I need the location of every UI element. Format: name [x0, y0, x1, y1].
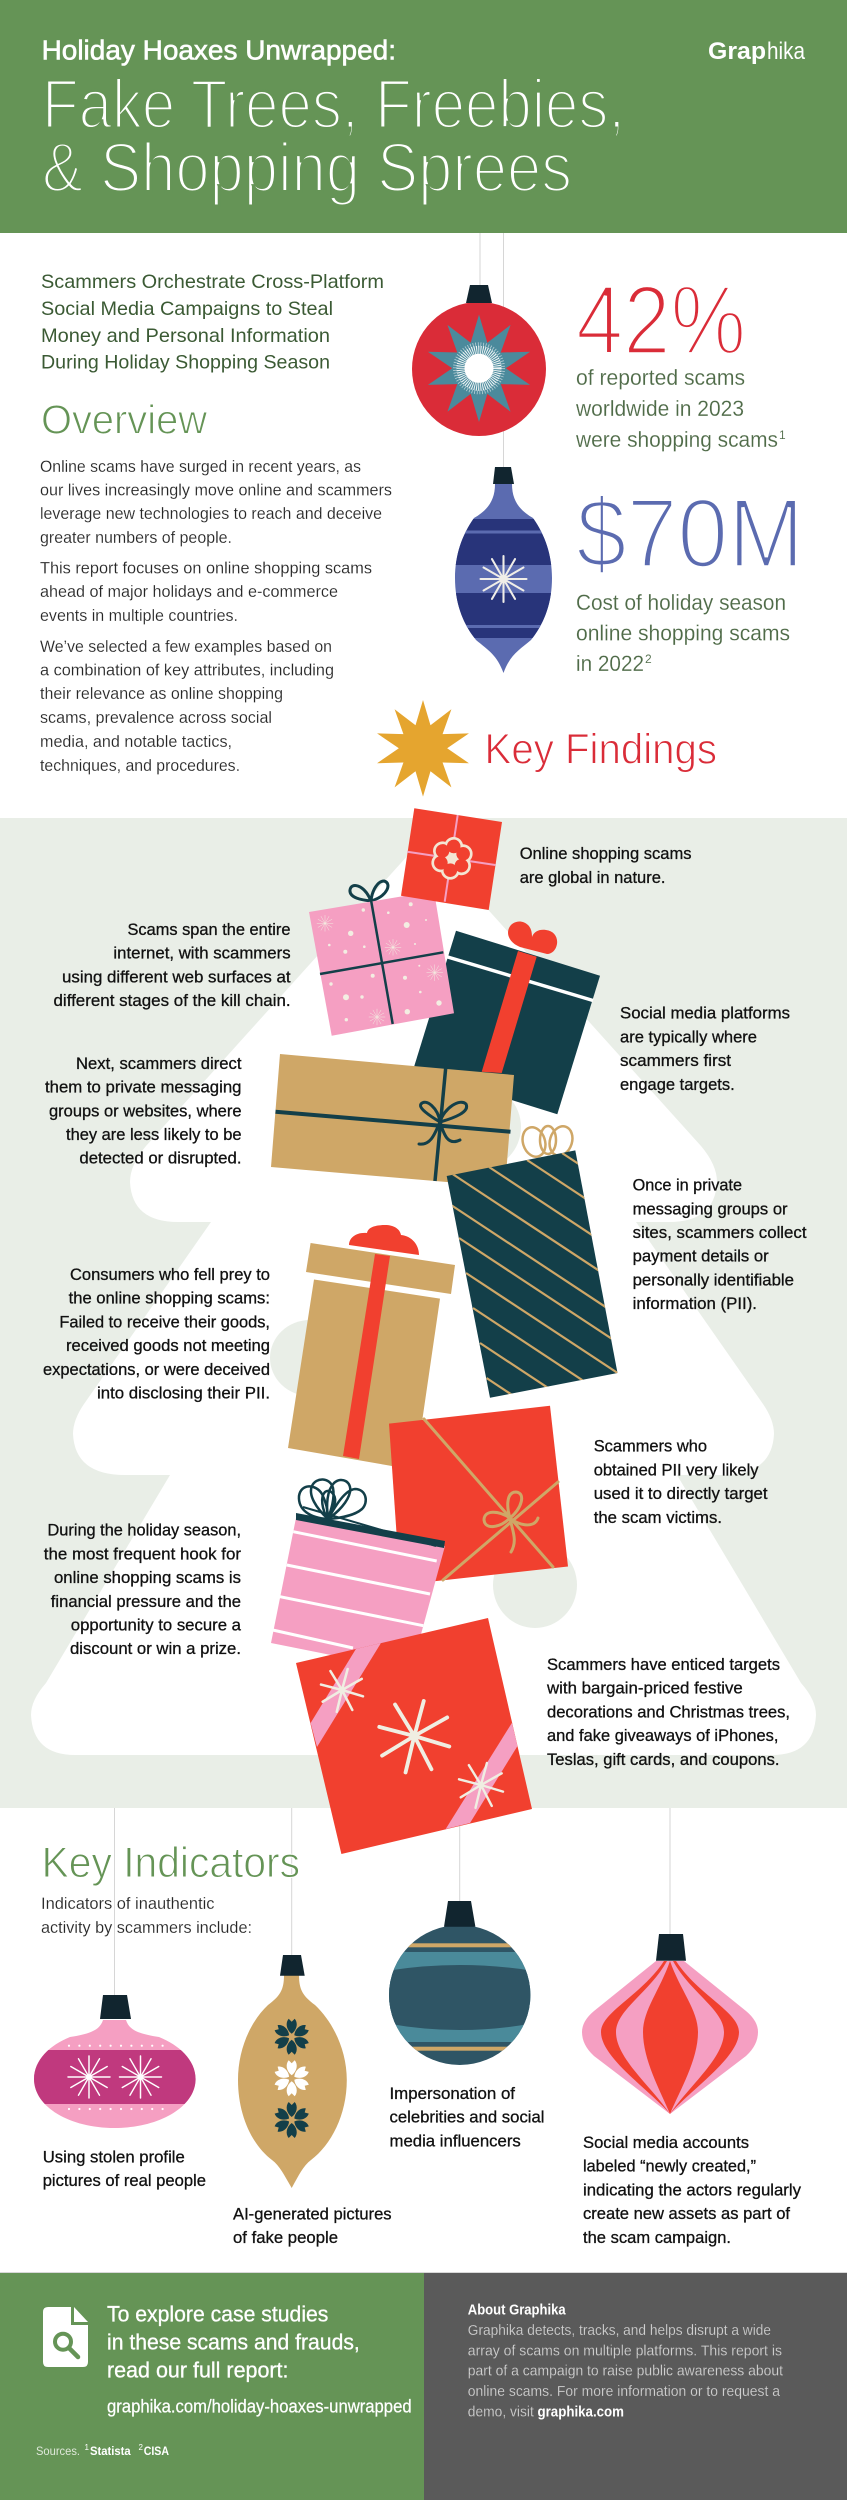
main title — [42, 65, 625, 206]
logo: Graphika: hika — [767, 38, 806, 65]
finding: entire internet: internet, with scammers — [113, 944, 291, 963]
stat caption: of reported scams — [576, 365, 745, 390]
caption: AI pictures: AI-generated pictures — [233, 2204, 392, 2223]
ornament: teal striped — [389, 1901, 530, 2065]
finding: global: are global in nature. — [520, 868, 666, 887]
overview body text: This report focuses on online shopping scams — [40, 558, 372, 578]
finding: entire internet: different stages of the kill chain. — [54, 991, 291, 1010]
overview body text: media, and notable tactics, — [40, 732, 232, 751]
finding: direct targeting: obtained PII very likely — [594, 1460, 759, 1479]
subhead — [41, 271, 384, 374]
ornament: tan with flowers — [238, 1955, 347, 2188]
subhead: During Holiday Shopping Season — [41, 352, 330, 374]
caption: impersonation: media influencers — [390, 2132, 521, 2151]
sources: Sources. — [36, 2444, 80, 2458]
stat caption: in 2022 — [576, 651, 644, 676]
finding: PII: information (PII). — [633, 1294, 757, 1313]
finding: direct targeting — [594, 1437, 768, 1527]
finding: social media — [620, 1003, 790, 1094]
caption: AI pictures — [233, 2204, 392, 2247]
finding: consumers: the online shopping scams: — [69, 1289, 270, 1308]
stat caption: worldwide in 2023 — [575, 396, 744, 421]
finding: PII: personally identifiable — [633, 1270, 794, 1289]
finding: social media: are typically where — [620, 1027, 757, 1046]
caption: newly created: create new assets as part of — [583, 2204, 790, 2223]
indicators intro: Indicators of inauthentic — [41, 1894, 215, 1913]
finding: social media: Social media platforms — [620, 1003, 790, 1022]
about text — [468, 2322, 784, 2420]
finding: direct targeting: the scam victims. — [594, 1508, 722, 1527]
about text: array of scams on multiple platforms. This report is — [468, 2342, 782, 2359]
finding: social media: engage targets. — [620, 1075, 735, 1094]
main title: Fake Trees, Freebies, — [42, 65, 625, 143]
finding: PII: messaging groups or — [633, 1199, 788, 1218]
about text: demo, visit — [468, 2403, 535, 2420]
tree silhouette — [31, 838, 816, 1755]
finding: giveaways — [546, 1655, 790, 1769]
finding: consumers — [43, 1265, 270, 1402]
overview body text: leverage new technologies to reach and deceive — [40, 504, 382, 523]
call to action text — [107, 2302, 360, 2382]
sources: CISA — [144, 2444, 169, 2458]
stat caption: 2 — [645, 652, 652, 666]
finding: private messaging: groups or websites, where — [49, 1102, 242, 1121]
finding: private messaging — [45, 1054, 242, 1168]
stat caption: online shopping scams — [576, 620, 790, 646]
ornament: pink and red diamond — [582, 1934, 758, 2114]
finding: PII: payment details or — [633, 1247, 769, 1266]
ornament: red star — [412, 285, 546, 436]
caption: newly created — [583, 2133, 801, 2247]
finding: consumers: Failed to receive their goods, — [59, 1312, 270, 1331]
gift: tan with dark ribbon — [271, 1054, 514, 1187]
finding: PII: Once in private — [633, 1176, 742, 1195]
finding: entire internet: using different web surfaces at — [62, 967, 291, 986]
gift: pink with dots — [309, 881, 454, 1036]
about text: online scams. For more information or to request a — [468, 2383, 781, 2400]
sources: Statista — [90, 2444, 131, 2458]
overview body text: We’ve selected a few examples based on — [40, 637, 332, 656]
finding: direct targeting: Scammers who — [594, 1437, 707, 1456]
overview body text: a combination of key attributes, including — [40, 660, 334, 680]
about text: graphika.com — [538, 2403, 624, 2420]
finding: financial pressure: During the holiday season, — [48, 1521, 241, 1540]
finding: financial pressure: discount or win a prize. — [70, 1639, 241, 1658]
icon: gold star — [377, 700, 469, 797]
finding: consumers: into disclosing their PII. — [97, 1384, 270, 1402]
stat: $70M — [576, 478, 804, 676]
heading: Overview: Overview — [41, 396, 207, 442]
caption: newly created: Social media accounts — [583, 2133, 749, 2152]
finding: financial pressure: the most frequent hook for — [44, 1544, 241, 1563]
overview body text: their relevance as online shopping — [40, 684, 283, 703]
stat caption — [576, 590, 790, 676]
subhead: Scammers Orchestrate Cross-Platform — [41, 271, 384, 293]
caption: stolen pictures — [43, 2147, 206, 2190]
stat caption: were shopping scams — [575, 427, 778, 452]
finding: global: Online shopping scams — [520, 844, 692, 863]
call to action text: read our full report: — [107, 2357, 288, 2382]
gift: red with gold twine — [389, 1406, 568, 1584]
finding: financial pressure: opportunity to secure a — [71, 1616, 242, 1634]
finding: private messaging: they are less likely to be — [66, 1125, 242, 1144]
overview body text: greater numbers of people. — [40, 528, 232, 547]
stat: $70M: $70M — [576, 478, 804, 588]
finding: entire internet — [54, 920, 291, 1010]
heading: Key Indicators: Key Indicators — [42, 1839, 300, 1887]
finding: consumers: Consumers who fell prey to — [70, 1265, 270, 1284]
gift: large red with snowflakes — [296, 1618, 532, 1854]
finding: PII — [633, 1176, 807, 1313]
caption: stolen pictures: pictures of real people — [43, 2171, 206, 2190]
subhead: Social Media Campaigns to Steal — [41, 298, 333, 320]
stat caption — [575, 365, 786, 452]
logo: Graphika — [708, 38, 806, 65]
panel: key findings background — [0, 818, 847, 1808]
ornament strings top — [480, 233, 504, 470]
heading: Key Findings: Key Findings — [484, 726, 717, 774]
finding: global — [520, 844, 692, 887]
logo: Graphika: Grap — [708, 38, 766, 65]
overview body text: events in multiple countries. — [40, 606, 238, 625]
sources — [36, 2443, 169, 2458]
caption: newly created: the scam campaign. — [583, 2228, 731, 2247]
call to action text: in these scams and frauds, — [107, 2329, 360, 2354]
finding: financial pressure: financial pressure and the — [51, 1592, 241, 1611]
finding: giveaways: Scammers have enticed targets — [547, 1655, 780, 1674]
finding: giveaways: and fake giveaways of iPhones, — [547, 1726, 778, 1745]
finding: financial pressure — [44, 1521, 242, 1658]
caption: newly created: labeled “newly created,” — [583, 2157, 756, 2176]
about text: Graphika detects, tracks, and helps disrupt a wide — [468, 2322, 771, 2339]
subhead: Money and Personal Information — [41, 325, 330, 347]
finding: giveaways: with bargain-priced festive — [546, 1679, 743, 1698]
finding: giveaways: Teslas, gift cards, and coupons. — [547, 1750, 780, 1769]
main title: & Shopping Sprees — [42, 128, 572, 206]
finding: entire internet: Scams span the entire — [128, 920, 290, 939]
gift: pink striped with dark bow — [271, 1479, 445, 1671]
caption: impersonation: Impersonation of — [390, 2084, 515, 2103]
finding: consumers: received goods not meeting — [66, 1336, 270, 1355]
stat caption: Cost of holiday season — [576, 590, 786, 615]
caption: impersonation — [390, 2084, 544, 2151]
gift: tan tall with lid — [288, 1225, 455, 1470]
overview body text: techniques, and procedures. — [40, 756, 240, 775]
kicker title: Holiday Hoaxes Unwrapped: — [42, 34, 396, 65]
caption: stolen pictures: Using stolen profile — [43, 2147, 185, 2166]
finding: private messaging: Next, scammers direct — [76, 1054, 242, 1073]
overview body text: ahead of major holidays and e-commerce — [40, 582, 338, 601]
finding: consumers: expectations, or were deceived — [43, 1360, 270, 1379]
indicators intro — [41, 1894, 252, 1937]
sources: 1 — [84, 2443, 90, 2452]
stat: 42% — [575, 265, 786, 452]
finding: private messaging: them to private messaging — [45, 1078, 242, 1097]
call to action text: To explore case studies — [107, 2302, 328, 2327]
indicators intro: activity by scammers include: — [41, 1918, 252, 1937]
ornament: pink with magenta band — [30, 1995, 200, 2128]
stat: 42%: 42% — [576, 265, 746, 375]
caption: AI pictures: of fake people — [233, 2228, 338, 2247]
panel: footer call to action — [0, 2273, 424, 2500]
caption: impersonation: celebrities and social — [390, 2108, 544, 2127]
finding: financial pressure: online shopping scams is — [54, 1568, 241, 1587]
finding: private messaging: detected or disrupted. — [79, 1149, 242, 1168]
ornament: blue — [455, 467, 552, 673]
caption: newly created: indicating the actors regularly — [583, 2180, 801, 2199]
sources: 2 — [138, 2443, 144, 2452]
gift: dark teal with red ribbon — [413, 921, 600, 1114]
panel: header — [0, 0, 847, 233]
stat caption: 1 — [779, 428, 786, 442]
overview body text: Online scams have surged in recent years, as — [40, 457, 361, 476]
report link: graphika.com/holiday-hoaxes-unwrapped — [107, 2396, 412, 2417]
overview body text: scams, prevalence across social — [40, 708, 272, 727]
about heading: About Graphika — [468, 2302, 566, 2318]
panel: key indicators background strings — [114, 1808, 670, 1996]
icon: document with magnifier — [43, 2307, 88, 2367]
finding: social media: scammers first — [620, 1051, 731, 1070]
overview body text — [40, 457, 392, 775]
gift: dark teal with gold stripes — [446, 1124, 618, 1398]
finding: direct targeting: used it to directly target — [594, 1484, 768, 1503]
panel: about Graphika — [424, 2273, 847, 2500]
finding: giveaways: decorations and Christmas trees, — [547, 1702, 790, 1721]
overview body text: our lives increasingly move online and scammers — [40, 480, 392, 500]
gift: red small with flower bow — [401, 808, 502, 910]
about text: part of a campaign to raise public awareness about — [468, 2363, 784, 2380]
finding: PII: sites, scammers collect — [633, 1223, 807, 1242]
